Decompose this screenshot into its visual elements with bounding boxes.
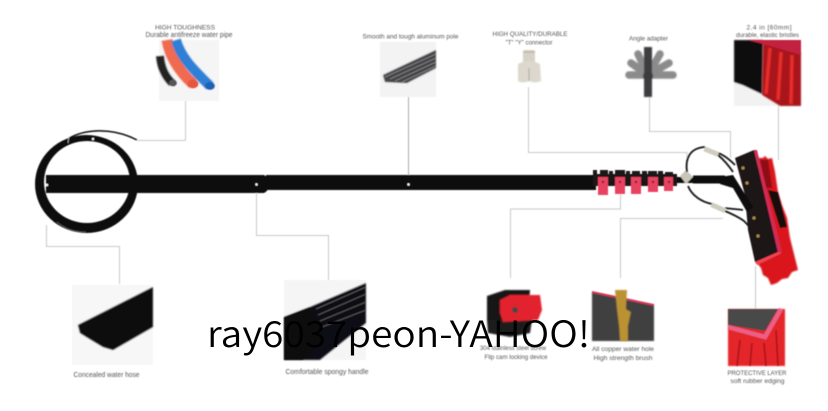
caption: bristles: durable, elastic bristles — [736, 32, 800, 39]
brass nozzles — [741, 166, 760, 238]
Y connector on pole — [680, 170, 693, 184]
photo: bristles — [734, 40, 801, 106]
caption: water hose: Concealed water hose — [74, 372, 140, 379]
caption: high toughness — [146, 24, 233, 39]
black bristle core — [768, 190, 787, 228]
caption: high toughness: Durable antifreeze water pipe — [146, 32, 233, 39]
photo: aluminum pole — [380, 42, 436, 97]
bristles — [757, 156, 798, 285]
caption: spongy handle: Comfortable spongy handle — [286, 369, 369, 376]
photo: concealed water hose — [72, 285, 153, 365]
caption: protective layer: soft rubber edging — [730, 378, 785, 385]
pole: front section — [596, 177, 706, 183]
brush head — [720, 150, 798, 285]
leader lines connecting photos to pole parts — [46, 87, 778, 309]
pole: aluminum section — [266, 175, 596, 190]
caption: copper water hole: All copper water hole — [592, 346, 654, 353]
rubber edging — [754, 150, 782, 253]
photo: spongy handle — [284, 280, 366, 360]
brush feed hoses — [687, 147, 758, 237]
pole pivot dots — [46, 138, 410, 186]
hose coil — [35, 131, 138, 233]
photo: flip cam locking device — [487, 290, 542, 337]
caption: aluminum pole: Smooth and tough aluminum pole — [362, 34, 459, 40]
flip cam clamps — [593, 170, 677, 195]
caption: bristles: 2.4 in [60mm] — [746, 24, 792, 32]
caption: high toughness: HIGH TOUGHNESS — [155, 24, 215, 32]
dark bristle shading — [760, 160, 772, 188]
pole mount hub — [720, 175, 753, 212]
photo: copper water hole — [592, 290, 654, 341]
caption: connector — [492, 31, 568, 46]
hose couplers — [703, 147, 726, 213]
caption: flip cam locking device: 304 stainless steel screw — [480, 345, 546, 352]
caption: protective layer — [728, 370, 787, 385]
caption: connector: "T" "Y" connector — [506, 40, 553, 46]
caption: flip cam locking device — [480, 345, 548, 361]
pole: handle section — [46, 175, 267, 193]
caption: angle adapter: Angle adapter — [629, 36, 669, 42]
bottom edge — [755, 252, 782, 265]
photo: antifreeze water pipe — [159, 40, 219, 101]
photo: protective layer — [728, 309, 785, 366]
caption: protective layer: PROTECTIVE LAYER — [728, 370, 787, 377]
photo: angle adapter — [629, 47, 673, 97]
brush back plate — [735, 150, 778, 262]
telescopic pole — [46, 175, 725, 193]
caption: copper water hole: High strength brush — [594, 355, 653, 362]
caption: connector: HIGH QUALITY/DURABLE — [492, 31, 568, 38]
caption: copper water hole — [592, 346, 654, 362]
caption: bristles — [736, 24, 800, 39]
caption: flip cam locking device: Flip cam locking device — [484, 354, 548, 361]
photo: Y connector — [518, 50, 541, 82]
watermark: ray6037peon-YAHOO! — [207, 306, 590, 358]
